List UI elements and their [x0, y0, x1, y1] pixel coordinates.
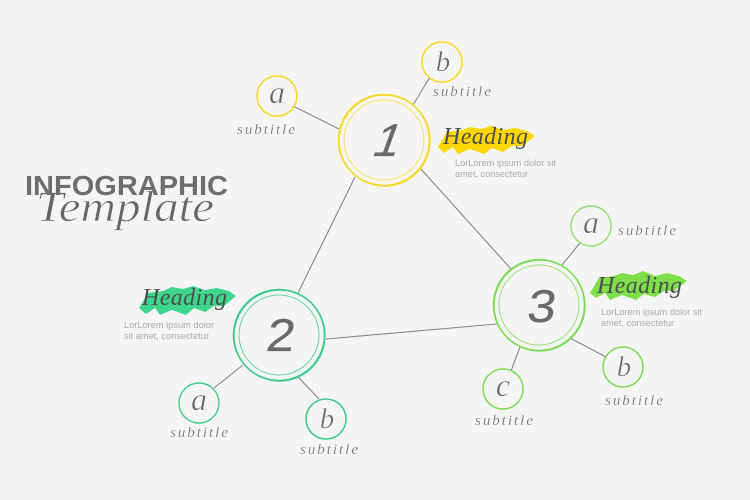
- heading 1 with yellow brush: Heading: [442, 124, 528, 150]
- node 2: [234, 290, 325, 381]
- node 3a: [571, 204, 676, 246]
- body text 1: LorLorem ipsum dolor sit: [455, 158, 556, 168]
- node 2a: a: [191, 381, 207, 417]
- title: INFOGRAPHIC: [25, 170, 228, 201]
- node 3: 3: [524, 281, 560, 332]
- body text 2: sit amet, consectetur: [124, 331, 209, 341]
- body text 3: amet, consectetur: [601, 318, 674, 328]
- node 3a: subtitle: [618, 223, 676, 239]
- body text 1: amet, consectetur: [455, 169, 528, 179]
- node 1b: b: [436, 46, 450, 78]
- heading 2 with green brush: Heading: [141, 285, 227, 311]
- body text 3: [601, 307, 702, 328]
- node 2b: b: [320, 403, 334, 435]
- heading 3 with lime brush: Heading: [596, 273, 682, 299]
- body text 2: [124, 320, 214, 341]
- title: Template: [36, 184, 214, 231]
- node 3c: c: [496, 367, 510, 403]
- node 2b: [300, 399, 358, 458]
- node 3a: a: [583, 204, 599, 240]
- node 3c: [475, 367, 533, 429]
- body text 3: LorLorem ipsum dolor sit: [601, 307, 702, 317]
- node 1: [338, 94, 430, 186]
- node 3: [494, 260, 585, 351]
- title: [25, 170, 228, 231]
- node 2a: subtitle: [170, 425, 228, 441]
- node 1a: a: [269, 74, 285, 110]
- node 1: 1: [366, 115, 411, 167]
- body text 1: [455, 158, 556, 179]
- node 3b: subtitle: [605, 393, 663, 409]
- node 1b: [422, 42, 491, 100]
- node 1a: [237, 74, 297, 138]
- node 2a: [170, 381, 228, 441]
- node 3b: b: [617, 351, 631, 383]
- node 1a: subtitle: [237, 122, 295, 138]
- connector lines: [214, 77, 606, 399]
- node 2: 2: [263, 310, 299, 361]
- body text 2: LorLorem ipsum dolor: [124, 320, 214, 330]
- node 1b: subtitle: [433, 84, 491, 100]
- node 3b: [603, 347, 663, 409]
- node 3c: subtitle: [475, 413, 533, 429]
- node 2b: subtitle: [300, 442, 358, 458]
